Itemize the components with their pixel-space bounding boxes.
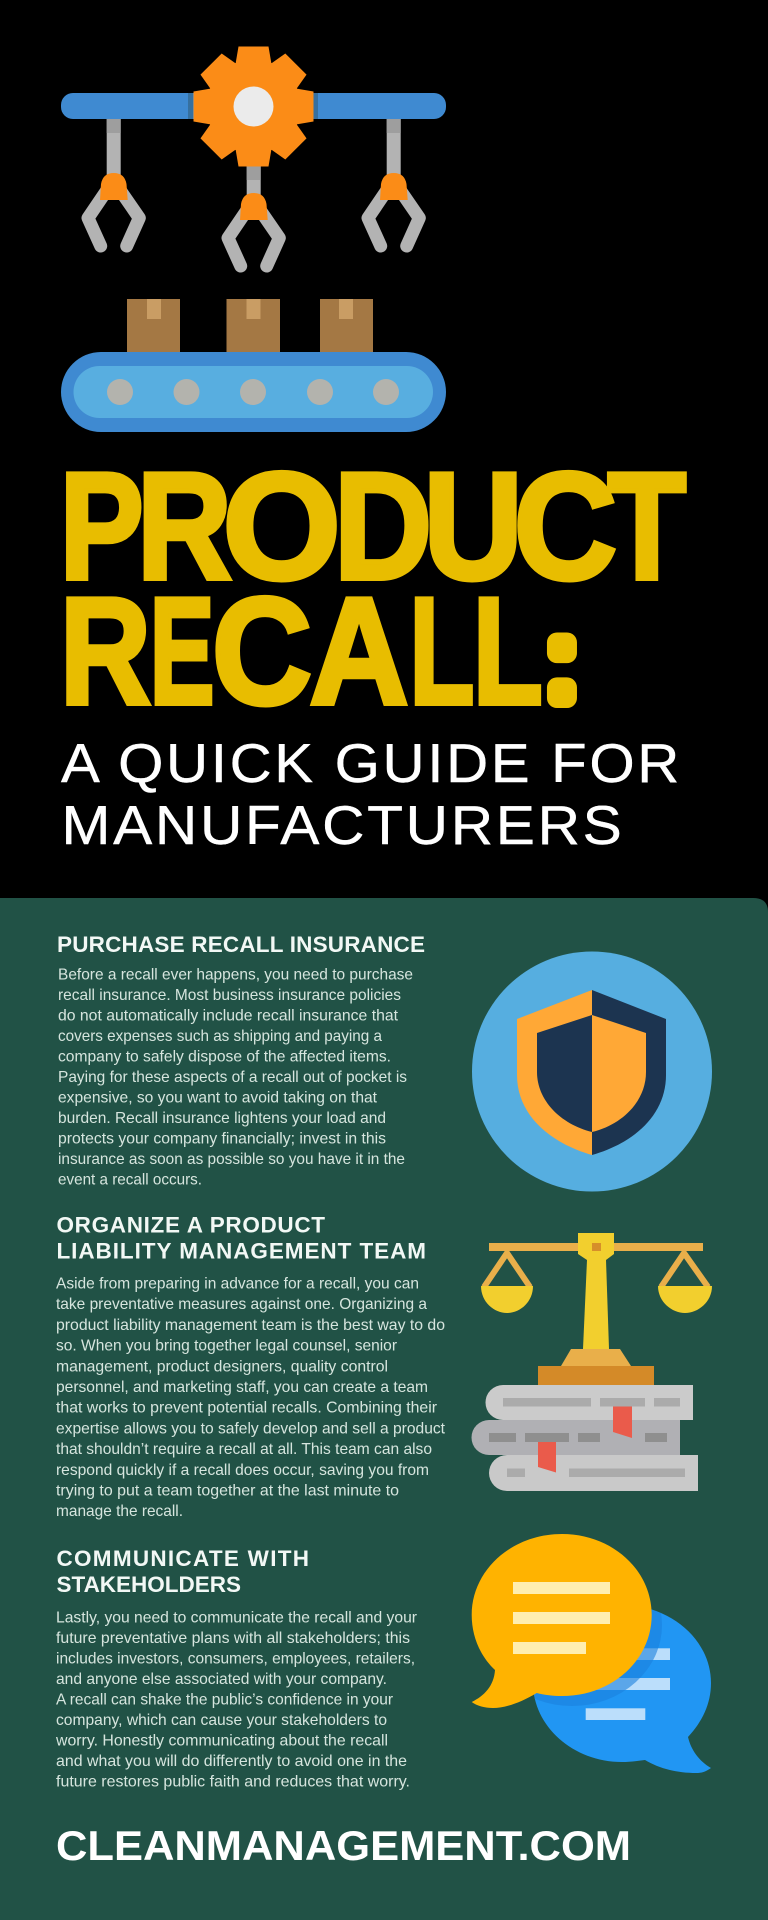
icon: horizontal gantry bar [61,93,446,119]
title: Product Recall: O [223,442,341,612]
icon: orange speech bubble [472,1534,652,1708]
text block: organize team body: that shouldn’t require a recall at all. This team can also [56,1441,432,1458]
icon: conveyor belt [61,352,446,432]
text block: purchase recall insurance body: company to safely dispose of the affected items. [58,1048,391,1066]
illustration: factory robot arms and conveyor belt [61,46,446,432]
text block: organize team body [56,1276,446,1520]
title: Product Recall: R [60,566,151,736]
text block: purchase recall insurance body: Paying for these aspects of a recall out of pocket is [58,1069,407,1086]
text block: purchase recall insurance body [58,966,413,1188]
text block: organize team body: personnel, and marketing staff, you can create a team [56,1379,428,1396]
text block: communicate body: future preventative plans with all stakeholders; this [56,1630,410,1647]
subtitle: A quick guide for manufacturers: MANUFACTURERS [62,794,624,856]
heading: communicate with stakeholders [56,1546,309,1597]
icon: cardboard box three [320,299,373,352]
heading: communicate with stakeholders: COMMUNICATE WITH [56,1546,309,1571]
text block: organize team body: that works to prevent potential recalls. Combining their [56,1400,437,1417]
heading: organize a product liability management team: ORGANIZE A PRODUCT [56,1212,325,1238]
heading: organize a product liability management team: LIABILITY MANAGEMENT TEAM [56,1238,426,1264]
icon: blue speech bubble [534,1609,711,1773]
text block: organize team body: manage the recall. [56,1503,183,1520]
icon: robot claw right [368,119,419,246]
text block: organize team body: product liability management team is the best way to do [56,1317,445,1334]
heading: communicate with stakeholders: STAKEHOLDERS [56,1572,241,1597]
subtitle: A quick guide for manufacturers [61,732,682,856]
text block: purchase recall insurance body: insurance as soon as possible so you have it in the [58,1151,405,1168]
text block: communicate body: and what you will do differently to avoid one in the [56,1753,407,1770]
icon: left scale pan [481,1253,533,1313]
icon: speech bubbles [472,1534,711,1773]
text block: organize team body: trying to put a team together at the last minute to [56,1482,399,1500]
icon: robot claw left [88,119,139,246]
title: Product Recall: R [137,442,232,612]
subtitle: A quick guide for manufacturers: A QUICK GUIDE FOR [61,732,682,794]
text block: purchase recall insurance body: burden. Recall insurance lightens your load and [58,1110,386,1127]
title: Product Recall: : [547,604,577,721]
icon: cardboard box two [226,299,280,352]
text block: communicate body [55,1610,417,1791]
text block: organize team body: Aside from preparing in advance for a recall, you can [56,1276,419,1292]
text block: organize team body: so. When you bring together legal counsel, senior [56,1338,397,1355]
text block: purchase recall insurance body: event a recall occurs. [58,1172,202,1188]
text block: purchase recall insurance body: do not automatically include recall insurance that [58,1008,399,1024]
text block: purchase recall insurance body: recall insurance. Most business insurance policies [58,987,401,1004]
title: Product Recall: C [514,442,617,612]
heading: purchase recall insurance: PURCHASE RECALL INSURANCE [57,932,425,957]
text block: organize team body: management, product designers, quality control [56,1358,388,1375]
text block: communicate body: future restores public faith and reduces that worry. [56,1774,410,1791]
title: Product Recall: T [608,442,686,612]
text block: purchase recall insurance body: protects your company financially; invest in this [58,1130,386,1148]
title: Product Recall: D [334,442,432,612]
section: purchase recall insurance [57,932,425,1188]
title: Product Recall [60,442,686,736]
text block: purchase recall insurance body: Before a recall ever happens, you need to purchase [58,966,413,984]
icon: shield in blue circle [472,952,712,1192]
section: organize a product liability management team [56,1212,446,1520]
icon: stack of books [472,1385,698,1491]
text block: purchase recall insurance body: expensive, so you want to avoid taking on that [58,1090,378,1106]
title: Product Recall: U [424,442,523,612]
text block: purchase recall insurance body: covers expenses such as shipping and paying a [58,1028,382,1045]
text block: communicate body: Lastly, you need to communicate the recall and your [56,1610,417,1627]
panel: green content panel [0,898,768,1920]
title: Product Recall: L [473,566,543,736]
icon: orange gear [194,46,314,166]
title: Product Recall: L [409,566,474,736]
text block: communicate body: A recall can shake the public’s confidence in your [56,1692,393,1709]
title: Product Recall: A [310,566,408,736]
footer: website: CLEANMANAGEMENT.COM [56,1822,631,1869]
text block: communicate body: includes investors, consumers, employees, retailers, [56,1651,415,1668]
section: communicate with stakeholders [55,1546,417,1791]
icon: scale beam and pillar [489,1233,703,1389]
text block: communicate body: company, which can cause your stakeholders to [56,1712,387,1729]
icon: cardboard box one [127,299,180,352]
title: Product Recall: P [60,442,144,612]
text block: communicate body: and anyone else associated with your company. [56,1671,387,1688]
icon: right scale pan [658,1253,712,1313]
text block: organize team body: respond quickly if a recall does occur, saving you from [56,1462,429,1479]
icon: scales of justice on law books [472,1233,712,1491]
text block: organize team body: expertise allows you to safely develop and sell a product [56,1420,446,1437]
text block: communicate body: worry. Honestly communicating about the recall [55,1733,388,1750]
text block: organize team body: take preventative measures against one. Organizing a [56,1296,427,1313]
icon: robot claw centre [228,160,279,266]
title: Product Recall: C [212,566,312,736]
heading: organize a product liability management team [56,1212,426,1264]
title: Product Recall: E [150,566,214,736]
